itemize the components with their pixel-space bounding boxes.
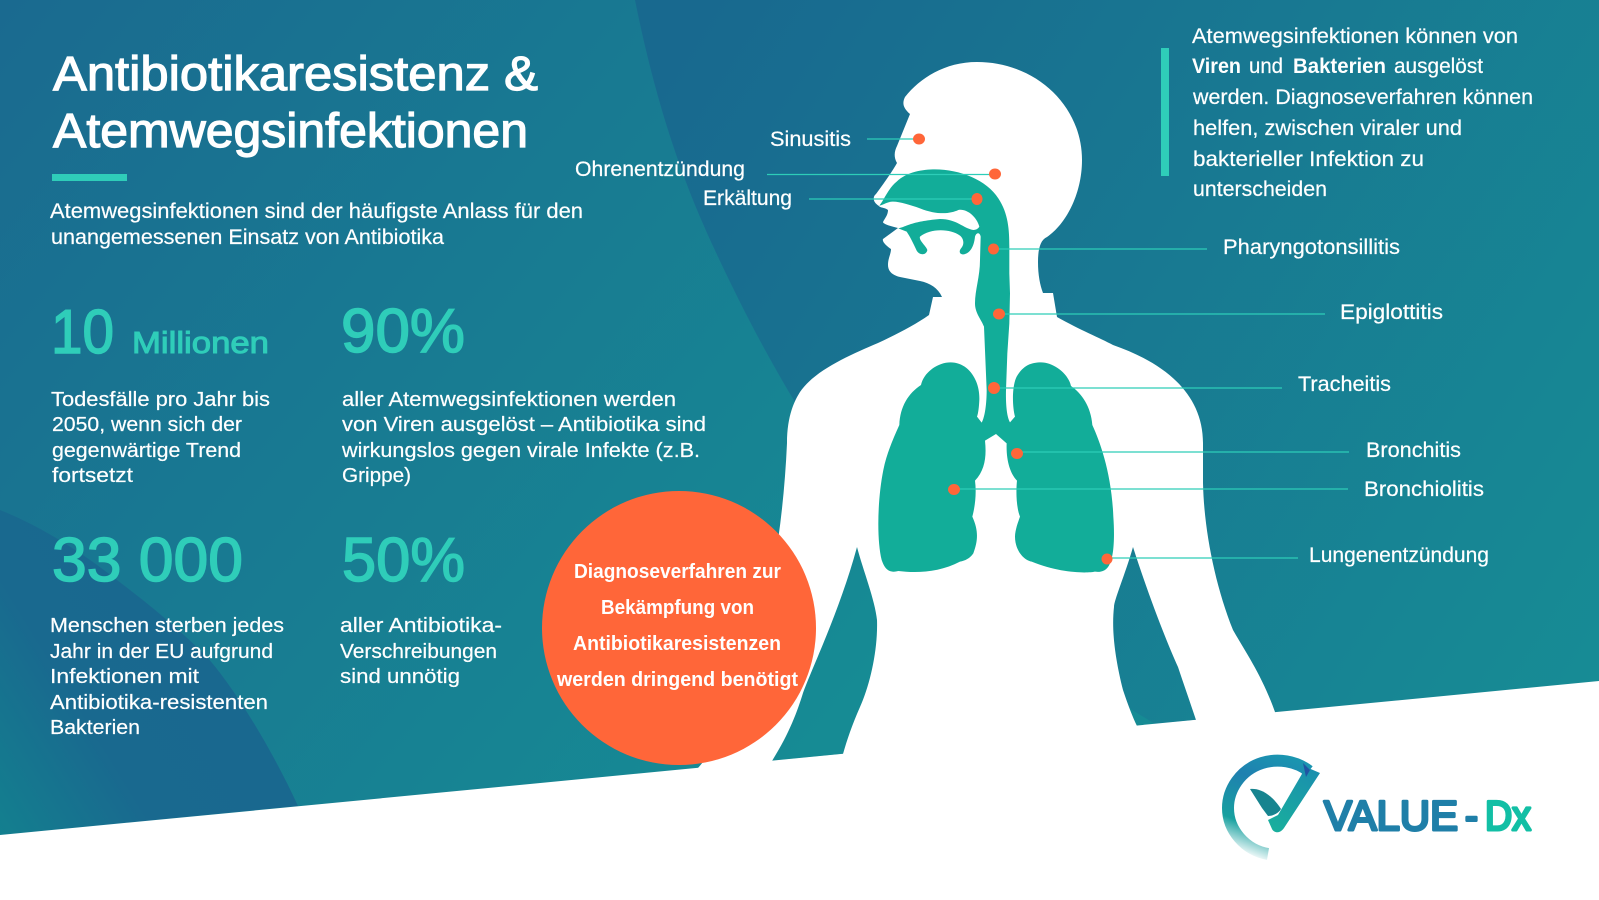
stat: 50% (340, 526, 502, 688)
labels: conditions: Lungenentzündung (1309, 544, 1489, 567)
text block: top right: unterscheiden (1193, 178, 1327, 201)
text block: top right: ausgelöst (1394, 55, 1483, 78)
stat: 10 Millionen: fortsetzt (52, 464, 133, 487)
stat: 33 000: Jahr in der EU aufgrund (50, 640, 273, 663)
stat: 50%: aller Antibiotika- (340, 614, 502, 637)
stat: 50%: sind unnötig (340, 665, 460, 688)
stat: 90%: 90% (341, 297, 465, 366)
callout circle: Bekämpfung von (601, 597, 754, 619)
text block: top right: Viren (1192, 55, 1241, 78)
title (53, 48, 538, 158)
callout circle (542, 491, 816, 765)
respiratory tract and lungs (878, 169, 1114, 572)
stat: 90% (341, 297, 706, 487)
title underline accent (52, 174, 127, 181)
labels: conditions: Sinusitis (770, 128, 851, 151)
callout circle: Antibiotikaresistenzen (573, 633, 781, 655)
stat: 10 Millionen: gegenwärtige Trend (52, 439, 241, 462)
labels: conditions: Bronchitis (1366, 439, 1461, 462)
logo: VALUE-Dx: - (1465, 792, 1478, 839)
callout circle: werden dringend benötigt (556, 669, 798, 691)
text block: top right: und (1249, 55, 1283, 78)
text block: top right: helfen, zwischen viraler und (1193, 117, 1462, 140)
title: Antibiotikaresistenz & (53, 48, 538, 101)
text block: top right: bakterieller Infektion zu (1193, 148, 1424, 171)
stat: 90%: aller Atemwegsinfektionen werden (342, 388, 676, 411)
text block: top right (1192, 25, 1533, 201)
stat: 33 000: Menschen sterben jedes (50, 614, 284, 637)
stat: 10 Millionen: Todesfälle pro Jahr bis (51, 388, 270, 411)
logo: VALUE-Dx: VALUE (1324, 792, 1458, 839)
labels: conditions: Pharyngotonsillitis (1223, 236, 1400, 259)
marker dots (913, 134, 1112, 564)
callout lines (767, 139, 1349, 558)
subtitle (50, 200, 583, 249)
stat: 50%: 50% (342, 526, 465, 595)
labels: conditions: Erkältung (703, 187, 792, 210)
stat: 10 Millionen: Millionen (132, 325, 269, 360)
stat: 50%: Verschreibungen (340, 640, 497, 663)
callout circle: Diagnoseverfahren zur (574, 561, 781, 583)
stat: 90%: von Viren ausgelöst – Antibiotika sind (342, 413, 706, 436)
stat: 33 000: Antibiotika-resistenten (50, 691, 268, 714)
stat: 10 Millionen (51, 298, 270, 487)
logo: VALUE-Dx: Dx (1485, 792, 1531, 839)
stat: 10 Millionen: 10 (51, 298, 114, 367)
logo: VALUE-Dx (1228, 761, 1531, 854)
stat: 33 000 (50, 526, 284, 739)
labels: conditions: Epiglottitis (1340, 301, 1443, 324)
stat: 33 000: Bakterien (50, 716, 140, 739)
stat: 10 Millionen: 2050, wenn sich der (52, 413, 242, 436)
text block: top right: Atemwegsinfektionen können von (1192, 25, 1518, 48)
text block: top right: werden. Diagnoseverfahren können (1192, 86, 1533, 109)
stat: 33 000: Infektionen mit (50, 665, 199, 688)
human body silhouette (698, 62, 1275, 800)
stat: 90%: Grippe) (342, 464, 411, 487)
stat: 33 000: 33 000 (52, 526, 243, 595)
accent bar (1161, 48, 1169, 176)
labels: conditions: Tracheitis (1298, 373, 1391, 396)
title: Atemwegsinfektionen (53, 105, 528, 158)
stat: 90%: wirkungslos gegen virale Infekte (z.B. (341, 439, 700, 462)
labels: conditions: Bronchiolitis (1364, 478, 1484, 501)
labels: conditions: Ohrenentzündung (575, 158, 745, 181)
subtitle: Atemwegsinfektionen sind der häufigste Anlass für den (50, 200, 583, 223)
subtitle: unangemessenen Einsatz von Antibiotika (51, 226, 444, 249)
text block: top right: Bakterien (1293, 55, 1386, 78)
labels: conditions (575, 128, 1489, 567)
